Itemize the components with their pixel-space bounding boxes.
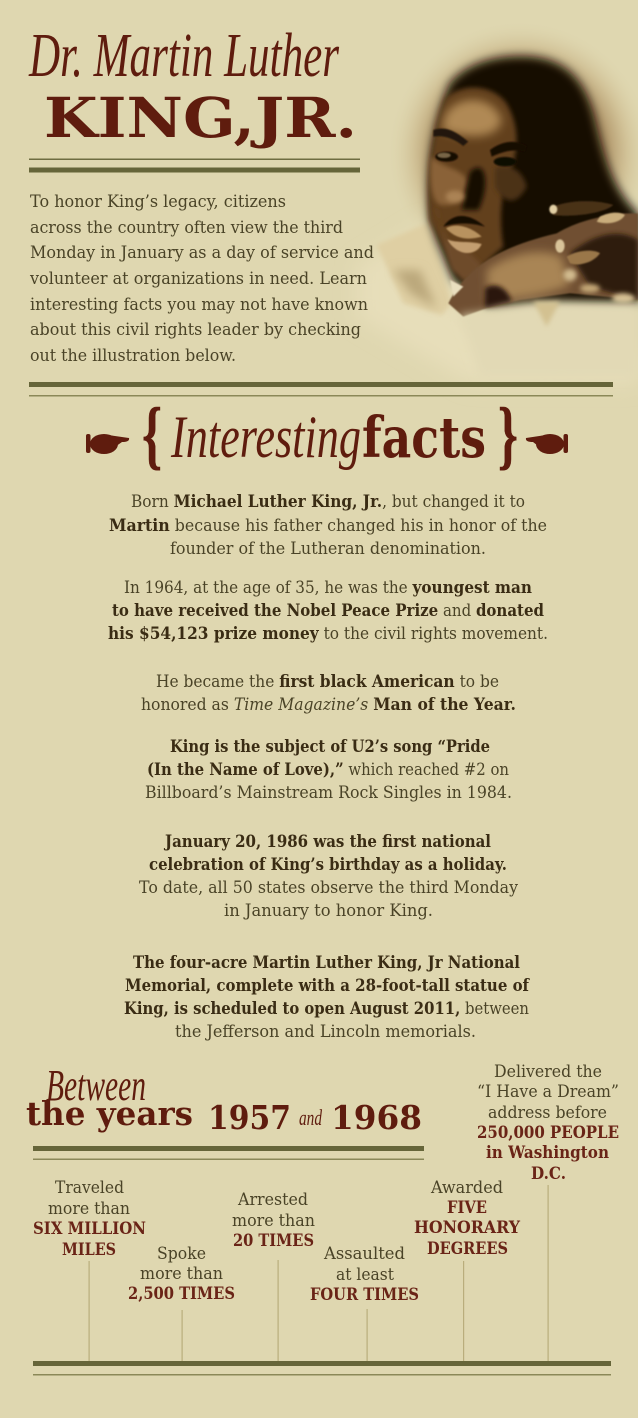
intro paragraph: across the country often view the third <box>30 218 343 238</box>
fact: national holiday: in January to honor King. <box>224 901 433 921</box>
timeline stems <box>88 1185 549 1362</box>
fact: national holiday: January 20, 1986 was the first national <box>163 832 491 852</box>
timeline item: degrees: Awarded <box>430 1178 503 1198</box>
fact: national holiday: To date, all 50 states observe the third Monday <box>139 878 518 898</box>
intro paragraph: interesting facts you may not have known <box>30 295 368 315</box>
timeline item: assaults: FOUR TIMES <box>310 1285 419 1305</box>
timeline item: I Have a Dream: 250,000 PEOPLE <box>477 1123 619 1143</box>
timeline item: travel <box>33 1178 146 1260</box>
heading: Between the years 1957 and 1968: the years <box>26 1094 193 1133</box>
timeline item: travel: MILES <box>62 1240 116 1260</box>
heading: Between the years 1957 and 1968: and <box>299 1105 323 1130</box>
timeline item: speeches: Spoke <box>157 1244 206 1264</box>
timeline item: degrees <box>414 1178 521 1259</box>
heading: Between the years 1957 and 1968: Between <box>46 1061 146 1110</box>
intro paragraph: out the illustration below. <box>30 346 236 366</box>
timeline item: I Have a Dream <box>477 1062 619 1184</box>
fact: national holiday <box>139 832 518 921</box>
icon: pointing hand left <box>86 434 129 454</box>
timeline item: assaults <box>310 1244 419 1305</box>
fact: national memorial: The four-acre Martin Luther King, Jr National <box>133 953 520 973</box>
timeline item: assaults: Assaulted <box>323 1244 405 1264</box>
timeline item: degrees: HONORARY <box>414 1218 521 1238</box>
header rules <box>29 158 360 172</box>
fact: national memorial: Memorial, complete with a 28-foot-tall statue of <box>125 976 530 996</box>
timeline item: travel: SIX MILLION <box>33 1219 146 1239</box>
timeline item: I Have a Dream: “I Have a Dream” <box>477 1082 619 1102</box>
fact: Nobel Peace Prize: his $54,123 prize money to the civil rights movement. <box>108 624 548 644</box>
fact: Nobel Peace Prize <box>108 578 548 644</box>
left brace: { <box>142 393 162 477</box>
title: KING, JR.: KING,JR. <box>44 85 357 150</box>
timeline heading rules <box>33 1146 424 1160</box>
heading: Interesting facts <box>86 393 568 477</box>
timeline item: I Have a Dream: Delivered the <box>494 1062 602 1082</box>
fact: national memorial: King, is scheduled to open August 2011, between <box>124 999 529 1019</box>
timeline item: I Have a Dream: D.C. <box>531 1164 566 1184</box>
intro paragraph: about this civil rights leader by checking <box>30 320 361 340</box>
facts: facts <box>362 405 486 471</box>
fact: name change: Martin because his father changed his in honor of the <box>109 516 547 536</box>
timeline item: arrests: more than <box>232 1211 315 1231</box>
Interesting: Interesting <box>170 404 361 470</box>
intro paragraph: volunteer at organizations in need. Learn <box>29 269 367 289</box>
heading: Between the years 1957 and 1968: 1957 <box>208 1098 291 1137</box>
fact: Time Man of the Year: honored as Time Magazine’s Man of the Year. <box>141 695 516 715</box>
fact: name change <box>109 492 547 559</box>
fact: U2 song: Billboard’s Mainstream Rock Singles in 1984. <box>145 783 512 803</box>
fact: national holiday: celebration of King’s birthday as a holiday. <box>149 855 507 875</box>
timeline item: degrees: DEGREES <box>427 1239 508 1259</box>
icon: pointing hand right <box>526 434 568 454</box>
timeline item: arrests <box>232 1190 315 1251</box>
title: Dr. Martin Luther: Dr. Martin Luther <box>28 22 340 90</box>
fact: U2 song: King is the subject of U2’s song “Pride <box>170 737 490 757</box>
fact: name change: founder of the Lutheran denomination. <box>170 539 486 559</box>
intro paragraph: To honor King’s legacy, citizens <box>30 192 286 212</box>
fact: Nobel Peace Prize: In 1964, at the age of 35, he was the youngest man <box>124 578 532 598</box>
fact: national memorial <box>124 953 530 1042</box>
section rules <box>29 382 613 396</box>
fact: U2 song <box>145 737 512 803</box>
intro paragraph <box>29 192 374 366</box>
timeline item: degrees: FIVE <box>447 1198 487 1218</box>
fact: Nobel Peace Prize: to have received the Nobel Peace Prize and donated <box>112 601 544 621</box>
timeline item: travel: more than <box>48 1199 130 1219</box>
timeline item: speeches: more than <box>140 1264 223 1284</box>
portrait photo of King <box>366 35 638 372</box>
fact: national memorial: the Jefferson and Lincoln memorials. <box>175 1022 476 1042</box>
timeline item: I Have a Dream: in Washington <box>486 1143 609 1163</box>
timeline item: assaults: at least <box>336 1265 394 1285</box>
heading: Between the years 1957 and 1968: 1968 <box>331 1098 422 1137</box>
timeline item: arrests: Arrested <box>237 1190 308 1210</box>
right brace: } <box>498 393 518 477</box>
timeline item: travel: Traveled <box>55 1178 124 1198</box>
timeline item: I Have a Dream: address before <box>488 1103 607 1123</box>
timeline item: speeches <box>128 1244 235 1304</box>
timeline item: speeches: 2,500 TIMES <box>128 1284 235 1304</box>
fact: name change: Born Michael Luther King, Jr., but changed it to <box>131 492 525 512</box>
fact: Time Man of the Year: He became the first black American to be <box>156 672 499 692</box>
fact: Time Man of the Year <box>141 672 516 715</box>
timeline item: arrests: 20 TIMES <box>233 1231 314 1251</box>
fact: U2 song: (In the Name of Love),” which reached #2 on <box>147 760 509 780</box>
intro paragraph: Monday in January as a day of service and <box>30 243 374 263</box>
heading: Between the years 1957 and 1968 <box>26 1061 422 1137</box>
timeline axis rules <box>33 1361 611 1376</box>
